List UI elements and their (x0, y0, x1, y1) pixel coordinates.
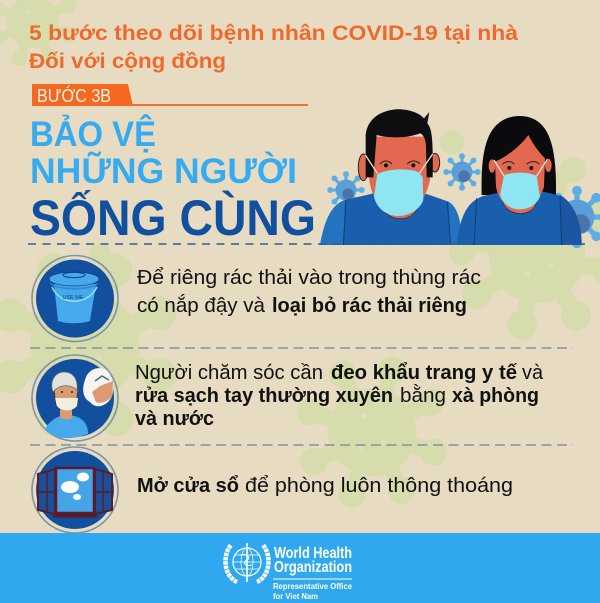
step text: caregiver: đeo khẩu trang y tế (331, 361, 518, 384)
title: 5 steps: 5 bước theo dõi bệnh nhân COVID-19 tại nhà (29, 21, 519, 45)
step text: caregiver (135, 361, 544, 430)
blue virus illustrations (327, 153, 600, 248)
heading: protect those living together (30, 114, 316, 246)
illustration: man in mask (320, 109, 462, 245)
step text: waste: loại bỏ rác thải riêng (272, 294, 467, 317)
icon: bucket: USE ME (62, 295, 84, 301)
step text: caregiver: rửa sạch tay thường xuyên (135, 384, 393, 407)
WHO wordmark (273, 545, 352, 601)
step text: window (137, 474, 513, 497)
step text: caregiver: xà phòng (452, 384, 539, 407)
step text: waste (137, 266, 481, 317)
WHO wordmark: Representative Office (273, 581, 352, 591)
heading: protect those living together: BẢO VỆ (30, 114, 156, 154)
step text: caregiver: và nước (135, 407, 214, 430)
heading: protect those living together: NHỮNG NGƯỜI (30, 151, 297, 191)
divider 1 (30, 347, 573, 349)
WHO wordmark: for Viet Nam (273, 591, 318, 601)
divider 2 (30, 444, 573, 446)
step text: caregiver: bằng (400, 384, 446, 407)
title: 5 steps: Đối với cộng đồng (29, 49, 226, 73)
step tag: BƯỚC 3B: BƯỚC 3B (37, 85, 111, 106)
icon: bucket (32, 256, 118, 342)
icon: caregiver washing hands (32, 355, 118, 441)
step tag: BƯỚC 3B (32, 84, 308, 106)
heading: protect those living together: SỐNG CÙNG (30, 189, 316, 246)
step text: window: Mở cửa sổ (137, 474, 239, 497)
dashed divider under heading (28, 243, 585, 245)
step text: waste: có nắp đậy và (137, 294, 266, 317)
WHO wordmark: Organization (274, 559, 352, 576)
step text: waste: Để riêng rác thải vào trong thùng rác (137, 266, 481, 289)
WHO wordmark: World Health (274, 545, 352, 562)
icon: open window (32, 447, 118, 533)
step text: caregiver: và (522, 361, 544, 384)
footer band (0, 533, 600, 603)
illustration: woman in mask (457, 116, 582, 245)
title: 5 steps (29, 21, 519, 73)
WHO logo (225, 543, 269, 582)
step text: caregiver: Người chăm sóc cần (135, 361, 323, 384)
step text: window: để phòng luôn thông thoáng (245, 474, 513, 497)
